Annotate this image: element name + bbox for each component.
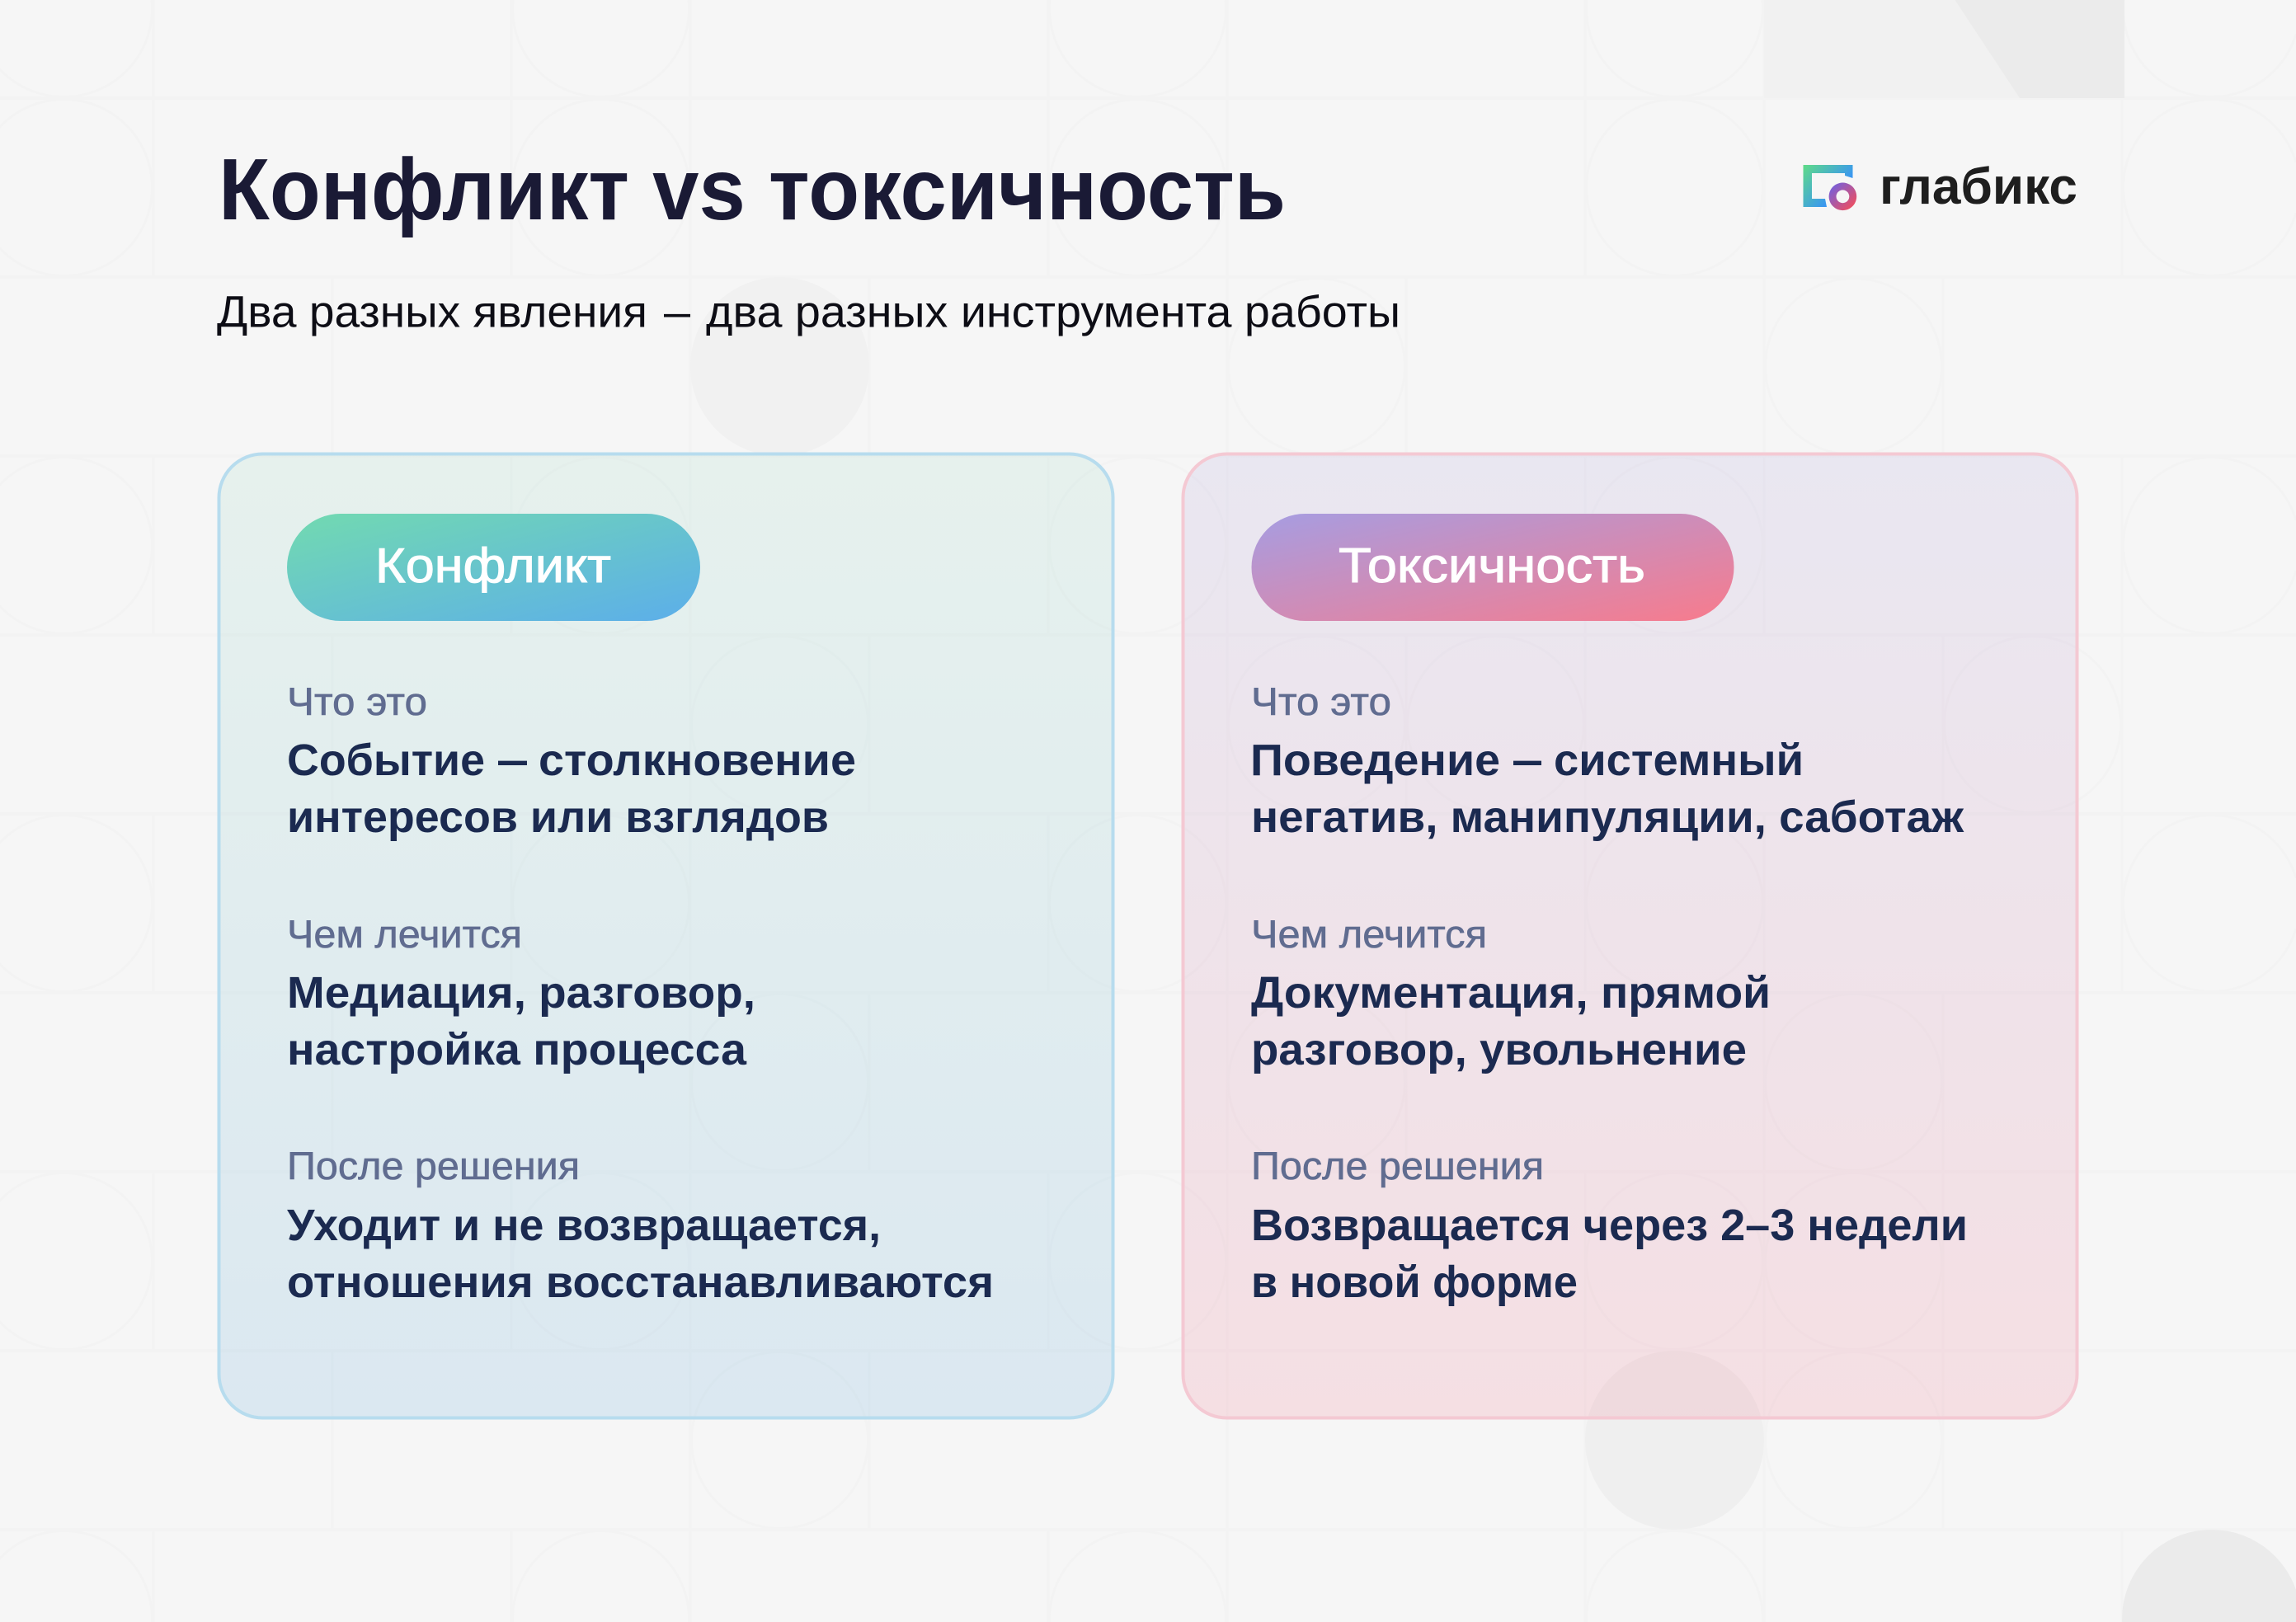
logo: глабикс: [1803, 158, 2077, 215]
panel: токсичность: [1183, 454, 2077, 1418]
block: чем лечится: Чем лечится: [287, 912, 522, 956]
block: чем лечится: [1251, 912, 1771, 1074]
block: что это: Что это: [1251, 679, 1391, 723]
block: чем лечится: разговор, увольнение: [1251, 1025, 1747, 1074]
subtitle: [217, 287, 1400, 336]
block: после решения: После решения: [287, 1144, 580, 1187]
block: что это: Поведение: [1250, 736, 1500, 785]
badge: токсичность: Токсичность: [1339, 538, 1645, 593]
block: что это: [1250, 679, 1964, 842]
block: что это: Что это: [287, 679, 427, 723]
badge: конфликт: Конфликт: [375, 538, 611, 593]
badge: токсичность: [1252, 514, 1734, 621]
block: чем лечится: Документация, прямой: [1251, 968, 1771, 1018]
block: после решения: Уходит и не возвращается,: [287, 1201, 881, 1250]
subtitle: —: [664, 287, 690, 336]
title: Конфликт vs токсичность: [219, 141, 1286, 238]
icon: logo square and ring: [1803, 165, 1856, 210]
block: чем лечится: Чем лечится: [1251, 912, 1487, 956]
subtitle: два разных инструмента работы: [706, 287, 1400, 336]
block: что это: —: [1513, 736, 1541, 785]
block: что это: негатив, манипуляции, саботаж: [1251, 792, 1964, 842]
block: что это: системный: [1554, 736, 1804, 785]
block: что это: интересов или взглядов: [287, 792, 829, 842]
block: после решения: в новой форме: [1251, 1258, 1578, 1307]
block: что это: —: [498, 736, 527, 785]
block: после решения: Возвращается через 2–3 недели: [1251, 1201, 1968, 1250]
block: после решения: отношения восстанавливаются: [287, 1258, 994, 1307]
block: что это: Событие: [287, 736, 485, 785]
block: что это: [287, 679, 856, 842]
block: чем лечится: Медиация, разговор,: [287, 968, 755, 1018]
block: чем лечится: [287, 912, 755, 1074]
logo wordmark: глабикс: [1880, 158, 2077, 215]
subtitle: Два разных явления: [217, 287, 647, 336]
block: после решения: [1251, 1144, 1968, 1307]
block: после решения: После решения: [1251, 1144, 1544, 1187]
block: что это: столкновение: [539, 736, 856, 785]
badge: конфликт: [287, 514, 700, 621]
block: чем лечится: настройка процесса: [287, 1025, 747, 1074]
block: после решения: [287, 1144, 994, 1307]
panel: конфликт: [219, 454, 1113, 1418]
